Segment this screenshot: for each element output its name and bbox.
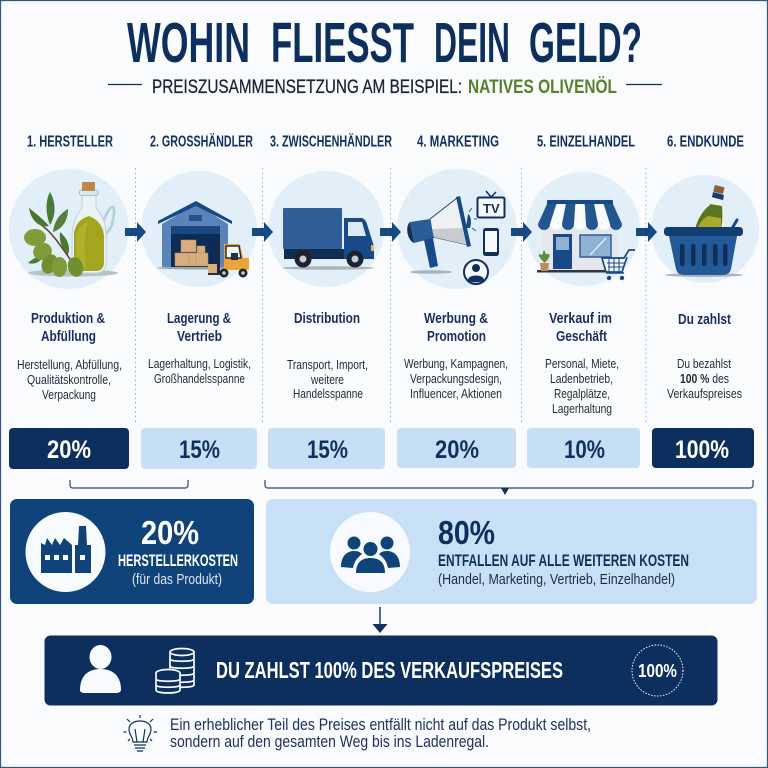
bracket: manufacturer (70, 480, 188, 488)
column 6 text: Du zahlst (678, 311, 731, 328)
percentage box 15%: 15% (307, 436, 348, 464)
column 4 text: Werbung, Kampagnen, (404, 356, 508, 371)
arrow (125, 222, 146, 242)
banner: you pay 100%: 100% (638, 661, 677, 681)
column 1 text: Produktion & (31, 310, 105, 327)
column 5 text: Lagerhaltung (552, 401, 612, 416)
icon: megaphone, TV, phone and user (397, 169, 517, 289)
icon: delivery truck (268, 171, 384, 287)
column 4 text: Influencer, Aktionen (410, 386, 502, 401)
column 1 text: Abfüllung (41, 328, 96, 345)
icon: warehouse and forklift (141, 171, 257, 287)
icon: factory (41, 526, 91, 573)
column 5 text: Personal, Miete, (545, 356, 619, 371)
note text: Ein erheblicher Teil des Preises entfällt nicht auf das Produkt selbst, (170, 716, 591, 734)
column 2 text: Großhandelsspanne (154, 371, 245, 386)
column 6 text: Du bezahlst (677, 356, 731, 371)
panel: manufacturer costs: 20% (141, 514, 199, 551)
panel: further costs: (Handel, Marketing, Vertrieb, Einzelhandel) (438, 572, 675, 588)
title (127, 11, 642, 75)
percentage box 20% (397, 428, 516, 468)
column 2 text: Vertrieb (177, 328, 222, 345)
column headings: 3. ZWISCHENHÄNDLER (270, 132, 392, 150)
icon: coin stacks (156, 648, 194, 693)
arrow: down (372, 607, 388, 633)
column 5 text: Verkauf im (549, 310, 612, 327)
percentage box 20%: 20% (435, 436, 479, 464)
column 3 text: Distribution (294, 310, 360, 327)
title: FLIESST (271, 11, 414, 75)
percentage box 20% (9, 428, 129, 469)
column 5 text: Geschäft (556, 328, 607, 345)
column 2 text: Lagerhaltung, Logistik, (148, 356, 251, 371)
column 4 text: Promotion (427, 328, 486, 345)
icon: light bulb (124, 715, 157, 751)
percentage box 15% (268, 428, 385, 469)
title: WOHIN (127, 11, 250, 75)
note text: sondern auf den gesamten Weg bis ins Ladenregal. (170, 733, 489, 751)
subtitle (108, 77, 662, 98)
column 2 text (148, 310, 251, 386)
column 4 text (404, 310, 508, 401)
column headings: 2. GROSSHÄNDLER (150, 132, 253, 150)
column 5 text: Ladenbetrieb, (550, 371, 613, 386)
banner: you pay 100% (44, 636, 718, 706)
column 6 text: Verkaufspreises (667, 386, 742, 401)
panel: further costs (266, 499, 757, 604)
column 1 text: Herstellung, Abfüllung, (17, 357, 122, 372)
percentage box 10%: 10% (564, 436, 605, 464)
icon: olive oil and olives (9, 169, 129, 289)
column 5 text: Regalplätze, (554, 386, 610, 401)
column 1 text (17, 310, 122, 402)
icon: shop with cart (526, 172, 640, 286)
column 2 text: Lagerung & (167, 310, 231, 327)
icon: group of people (341, 536, 400, 573)
arrow (636, 222, 657, 242)
arrow (252, 222, 273, 242)
column headings: 1. HERSTELLER (27, 134, 113, 150)
banner: you pay 100%: DU ZAHLST 100% DES VERKAUFSPREISES (216, 657, 563, 683)
subtitle: NATIVES OLIVENÖL (468, 77, 617, 98)
column headings (27, 132, 744, 150)
column headings: 4. MARKETING (417, 134, 499, 150)
icon: person (80, 645, 121, 693)
column 1 text: Verpackung (42, 387, 96, 402)
icon: shopping basket with bottle (651, 175, 759, 283)
bracket: further costs (265, 480, 753, 495)
column 3 text: Handelsspanne (293, 386, 363, 401)
title: DEIN (434, 11, 510, 75)
percentage box 15% (141, 428, 257, 469)
panel: manufacturer costs (10, 499, 254, 604)
note text (170, 716, 591, 751)
subtitle: PREISZUSAMMENSETZUNG AM BEISPIEL: (152, 77, 462, 98)
percentage box 100%: 100% (675, 436, 729, 464)
column 3 text (287, 310, 368, 401)
column 4 text: Verpackungsdesign, (410, 371, 502, 386)
arrow (380, 222, 401, 242)
panel: manufacturer costs: (für das Produkt) (132, 572, 222, 588)
icon: megaphone, TV, phone and user: TV (483, 201, 500, 216)
column 5 text (545, 310, 619, 416)
column 3 text: weitere (310, 372, 344, 387)
column 1 text: Qualitätskontrolle, (27, 372, 111, 387)
column 3 text: Transport, Import, (287, 357, 368, 372)
percentage box 15%: 15% (179, 436, 220, 464)
panel: manufacturer costs: HERSTELLERKOSTEN (118, 551, 238, 570)
column headings: 5. EINZELHANDEL (537, 134, 635, 150)
percentage box 20%: 20% (47, 436, 91, 464)
panel: further costs: 80% (438, 514, 495, 551)
title: GELD? (529, 11, 642, 75)
arrow (511, 222, 532, 242)
percentage box 100% (652, 428, 754, 468)
column 6 text: 100 % des (680, 371, 729, 386)
column 4 text: Werbung & (424, 310, 488, 327)
percentage box 10% (527, 428, 640, 468)
column 6 text (667, 311, 742, 401)
